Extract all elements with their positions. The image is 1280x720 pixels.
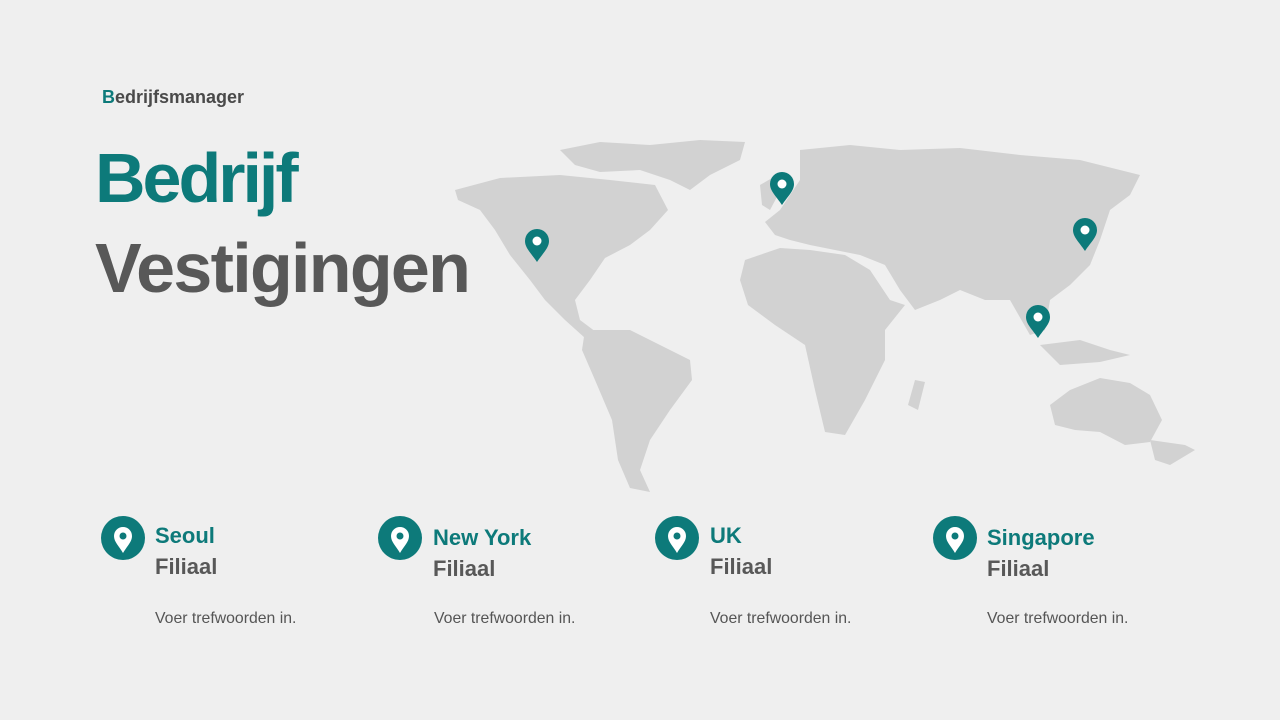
branch: Singapore: Singapore — [987, 525, 1095, 550]
branch: UK: Filiaal — [710, 554, 772, 579]
branch: New York — [378, 516, 575, 627]
branch: Seoul: Voer trefwoorden in. — [155, 610, 296, 627]
title: Vestigingen — [95, 229, 469, 307]
branch: Seoul: Filiaal — [155, 554, 217, 579]
branch: New York: Filiaal — [433, 556, 495, 581]
branch: Singapore: Filiaal — [987, 556, 1049, 581]
branch: Seoul: Seoul — [155, 523, 215, 548]
branch: UK: UK — [710, 523, 742, 548]
title: Bedrijf — [95, 139, 296, 217]
branch: Singapore — [933, 516, 1128, 627]
pins — [525, 172, 1097, 338]
branch: Singapore: Voer trefwoorden in. — [987, 610, 1128, 627]
title — [95, 139, 469, 307]
branch: New York: Voer trefwoorden in. — [434, 610, 575, 627]
branch: UK — [655, 516, 851, 627]
branch: UK: Voer trefwoorden in. — [710, 610, 851, 627]
subtitle: Bedrijfsmanager — [102, 87, 244, 107]
branch: Seoul — [101, 516, 296, 627]
branch: New York: New York — [433, 525, 531, 550]
